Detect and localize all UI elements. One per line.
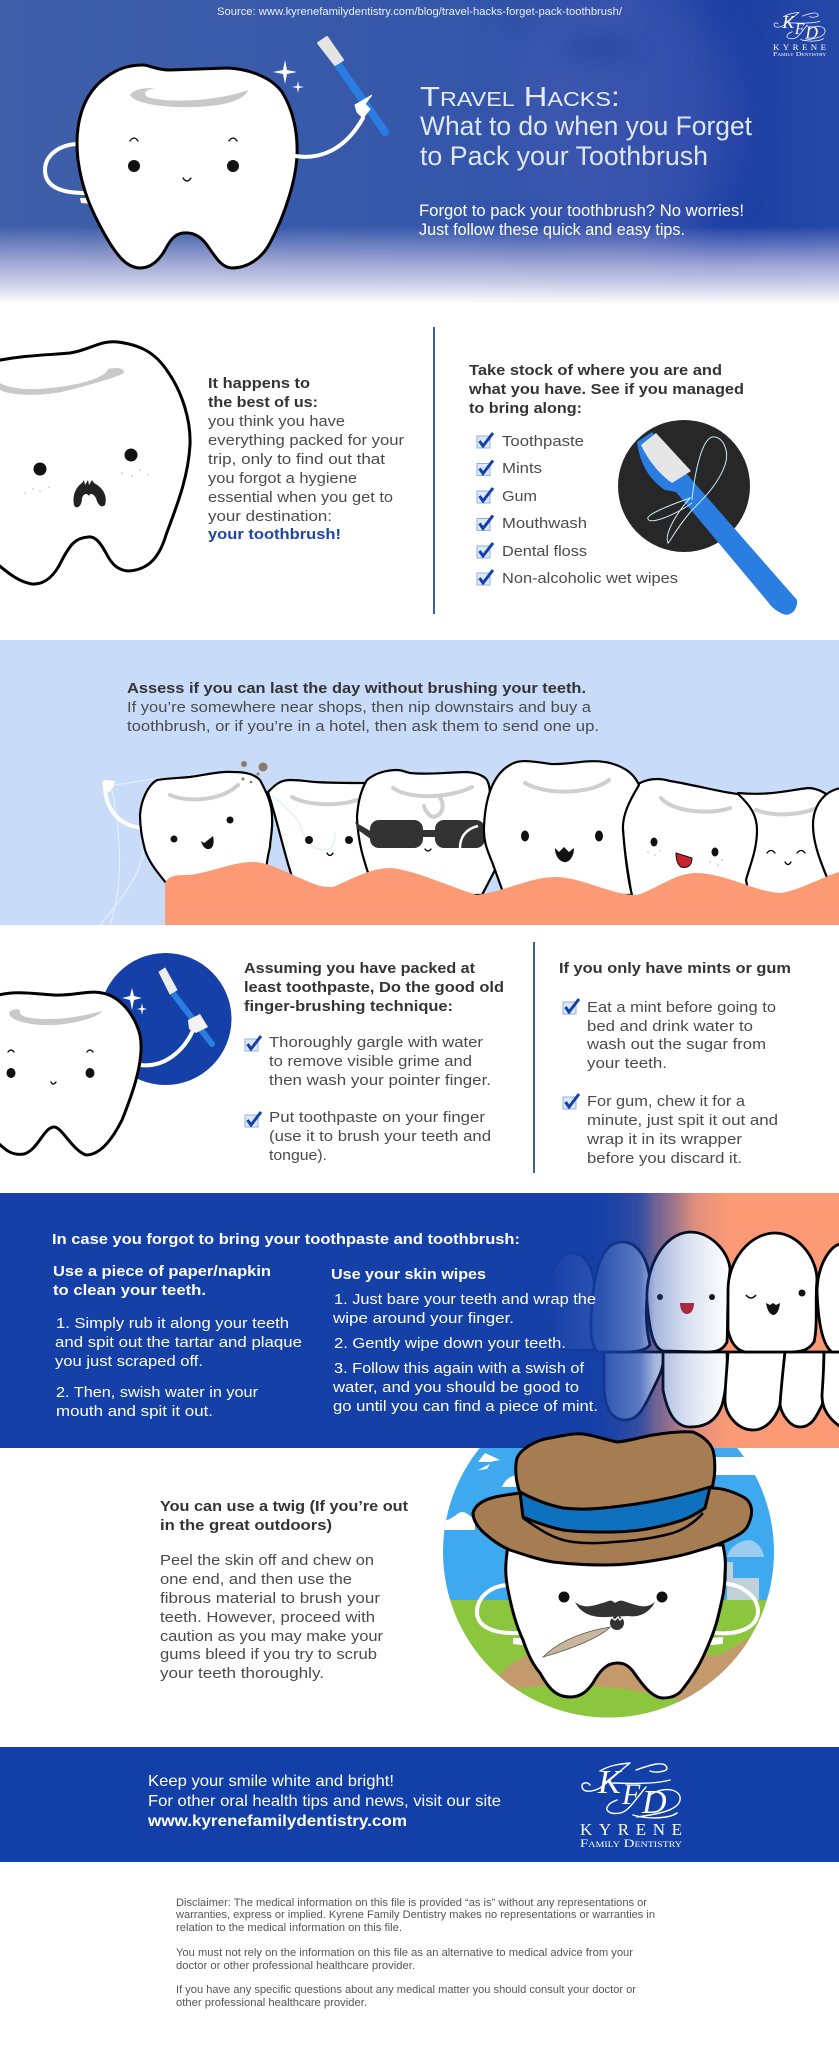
logo: top right: Family Dentistry <box>773 51 826 58</box>
disclaimer: You must not rely on the information on this file as an alternative to medical advice from your <box>176 1947 633 1959</box>
icon: tooth mascot with toothbrush <box>45 37 385 268</box>
text block: skin wipes: water, and you should be good to <box>332 1379 579 1396</box>
text block: paper napkin: to clean your teeth. <box>53 1282 206 1299</box>
text block: take stock: to bring along: <box>469 400 582 417</box>
text block: it happens to the best of us: you forgot a hygiene <box>208 470 357 487</box>
text block: paper napkin <box>53 1263 302 1420</box>
teeth row illustration <box>100 761 839 925</box>
text block: twig: caution as you may make your <box>160 1628 383 1645</box>
text block: assess: If you’re somewhere near shops, then nip downstairs and buy a <box>127 699 592 716</box>
tooth with toothbrush in blue circle <box>0 953 232 1155</box>
text block: finger brushing: least toothpaste, Do the good old <box>244 979 504 996</box>
text block: skin wipes: Use your skin wipes <box>331 1266 486 1283</box>
disclaimer: warranties, express or implied. Kyrene Family Dentistry makes no representations or warranties in <box>175 1909 655 1921</box>
hero subtitle: Just follow these quick and easy tips. <box>419 220 685 239</box>
text block: skin wipes <box>331 1266 598 1415</box>
title: What to do when you Forget <box>420 111 752 141</box>
text block: it happens to the best of us: everything packed for your <box>208 432 404 449</box>
text block: paper napkin: Use a piece of paper/napkin <box>53 1263 271 1280</box>
text block: mints or gum: bed and drink water to <box>587 1018 753 1035</box>
hero subtitle <box>419 201 744 239</box>
icon: toothbrush and floss on black circle <box>618 420 797 615</box>
checklist: Toothpaste <box>502 433 584 450</box>
logo: footer: D <box>641 1784 667 1821</box>
disclaimer <box>175 1897 655 2009</box>
text block: mints or gum: If you only have mints or gum <box>559 960 791 977</box>
text block: mints or gum <box>559 960 791 1167</box>
icon: tooth with hat and moustache <box>473 1432 758 1698</box>
logo: footer: F <box>621 1778 641 1811</box>
disclaimer: doctor or other professional healthcare provider. <box>176 1960 415 1972</box>
checklist: Gum <box>502 488 537 505</box>
logo: top right: D <box>804 23 818 43</box>
text block: mints or gum: minute, just spit it out and <box>587 1112 778 1129</box>
logo: top right <box>773 12 826 58</box>
text block: mints or gum: your teeth. <box>587 1055 667 1072</box>
hero subtitle: Forgot to pack your toothbrush? No worries! <box>419 201 744 220</box>
text block: finger brushing: Put toothpaste on your finger <box>269 1109 485 1126</box>
footer text: www.kyrenefamilydentistry.com <box>147 1813 407 1830</box>
footer text <box>147 1773 501 1830</box>
text block: twig: in the great outdoors) <box>160 1517 332 1534</box>
text block: skin wipes: wipe around your finger. <box>332 1310 514 1327</box>
text block: it happens to the best of us: essential when you get to <box>208 489 393 506</box>
title: Travel Hacks: <box>420 81 620 112</box>
footer text: For other oral health tips and news, visit our site <box>148 1793 501 1810</box>
text block: finger brushing: Assuming you have packed at <box>244 960 475 977</box>
panel: assess band <box>0 640 839 925</box>
text block: skin wipes: 1. Just bare your teeth and wrap the <box>334 1291 596 1308</box>
text block: paper napkin: 2. Then, swish water in your <box>56 1384 258 1401</box>
disclaimer: If you have any specific questions about any medical matter you should consult your doctor or <box>176 1984 636 1996</box>
text block: twig: your teeth thoroughly. <box>160 1665 324 1682</box>
text block: paper napkin: you just scraped off. <box>55 1353 203 1370</box>
checklist: Mints <box>502 460 542 477</box>
panel: footer band <box>0 1747 839 1862</box>
text block: twig <box>160 1498 408 1682</box>
text block: mints or gum: wrap it in its wrapper <box>586 1131 742 1148</box>
checklist <box>477 433 678 587</box>
text block: take stock <box>468 362 744 417</box>
checklist: Dental floss <box>502 543 587 560</box>
text block: twig: gums bleed if you try to scrub <box>160 1646 377 1663</box>
text block: it happens to the best of us: trip, only to find out that <box>208 451 386 468</box>
text block: paper napkin: 1. Simply rub it along your teeth <box>56 1315 289 1332</box>
text block: finger brushing: Thoroughly gargle with water <box>269 1034 483 1051</box>
checklist: Mouthwash <box>502 515 587 532</box>
logo: top right: KYRENE <box>773 42 826 52</box>
logo: footer: Family Dentistry <box>580 1836 682 1850</box>
text block: mints or gum: before you discard it. <box>587 1150 742 1167</box>
text block: paper napkin: and spit out the tartar and plaque <box>55 1334 302 1351</box>
text block: skin wipes: go until you can find a piece of mint. <box>333 1398 598 1415</box>
text block: it happens to the best of us: It happens to <box>208 375 310 392</box>
text block: finger brushing: finger-brushing technique: <box>244 998 453 1015</box>
text block: take stock: Take stock of where you are and <box>469 362 722 379</box>
text block: mints or gum: Eat a mint before going to <box>587 999 776 1016</box>
checklist: Non-alcoholic wet wipes <box>502 570 678 587</box>
text block: it happens to the best of us: your toothbrush! <box>208 526 341 543</box>
disclaimer: other professional healthcare provider. <box>176 1997 367 2009</box>
logo: footer: K <box>597 1764 623 1801</box>
title <box>420 81 752 171</box>
logo: top right: K <box>781 12 795 32</box>
text block: it happens to the best of us: the best of us: <box>208 394 318 411</box>
logo: footer: KYRENE <box>580 1820 682 1839</box>
panel: it happens tooth <box>0 342 190 584</box>
text block: finger brushing: to remove visible grime and <box>269 1053 472 1070</box>
text block: finger brushing <box>244 960 504 1164</box>
text block: finger brushing: tongue). <box>269 1147 327 1164</box>
source line: Source: www.kyrenefamilydentistry.com/blog/travel-hacks-forget-pack-toothbrush/ <box>217 6 623 18</box>
text block: mints or gum: wash out the sugar from <box>586 1036 766 1053</box>
text block: twig: Peel the skin off and chew on <box>160 1552 374 1569</box>
text block: paper napkin: mouth and spit it out. <box>56 1403 213 1420</box>
logo: top right: F <box>794 21 805 38</box>
text block: twig: fibrous material to brush your <box>160 1590 380 1607</box>
hero panel <box>0 0 839 310</box>
text block: finger brushing: (use it to brush your teeth and <box>269 1128 491 1145</box>
text block: skin wipes: 2. Gently wipe down your teeth. <box>334 1335 566 1352</box>
scene: outdoor circle background <box>443 1448 774 1718</box>
text block: skin wipes: 3. Follow this again with a swish of <box>334 1360 585 1377</box>
text block: assess: Assess if you can last the day without brushing your teeth. <box>127 680 586 697</box>
text block: twig: teeth. However, proceed with <box>160 1609 375 1626</box>
disclaimer: Disclaimer: The medical information on this file is provided “as is” without any representations or <box>176 1897 647 1909</box>
text block: it happens to the best of us: your destination: <box>208 508 332 525</box>
text block: twig: one end, and then use the <box>160 1571 352 1588</box>
text block: finger brushing: then wash your pointer finger. <box>269 1072 491 1089</box>
text block: assess: toothbrush, or if you’re in a hotel, then ask them to send one up. <box>127 718 599 735</box>
text block: twig: You can use a twig (If you’re out <box>160 1498 408 1515</box>
text block: mints or gum: For gum, chew it for a <box>587 1093 746 1110</box>
heading: no toothpaste: In case you forgot to bring your toothpaste and toothbrush: <box>52 1231 520 1248</box>
logo: footer <box>580 1763 682 1850</box>
teeth fading into blue <box>540 1193 839 1448</box>
text block: it happens to the best of us: you think you have <box>208 413 345 430</box>
gums <box>165 862 839 925</box>
disclaimer: relation to the medical information on this file. <box>176 1922 402 1934</box>
text block: assess <box>127 680 599 735</box>
title: to Pack your Toothbrush <box>420 141 708 171</box>
text block: take stock: what you have. See if you managed <box>468 381 744 398</box>
panel: no toothpaste band <box>0 1193 839 1448</box>
text block: it happens to the best of us <box>208 375 404 543</box>
footer text: Keep your smile white and bright! <box>148 1773 394 1790</box>
